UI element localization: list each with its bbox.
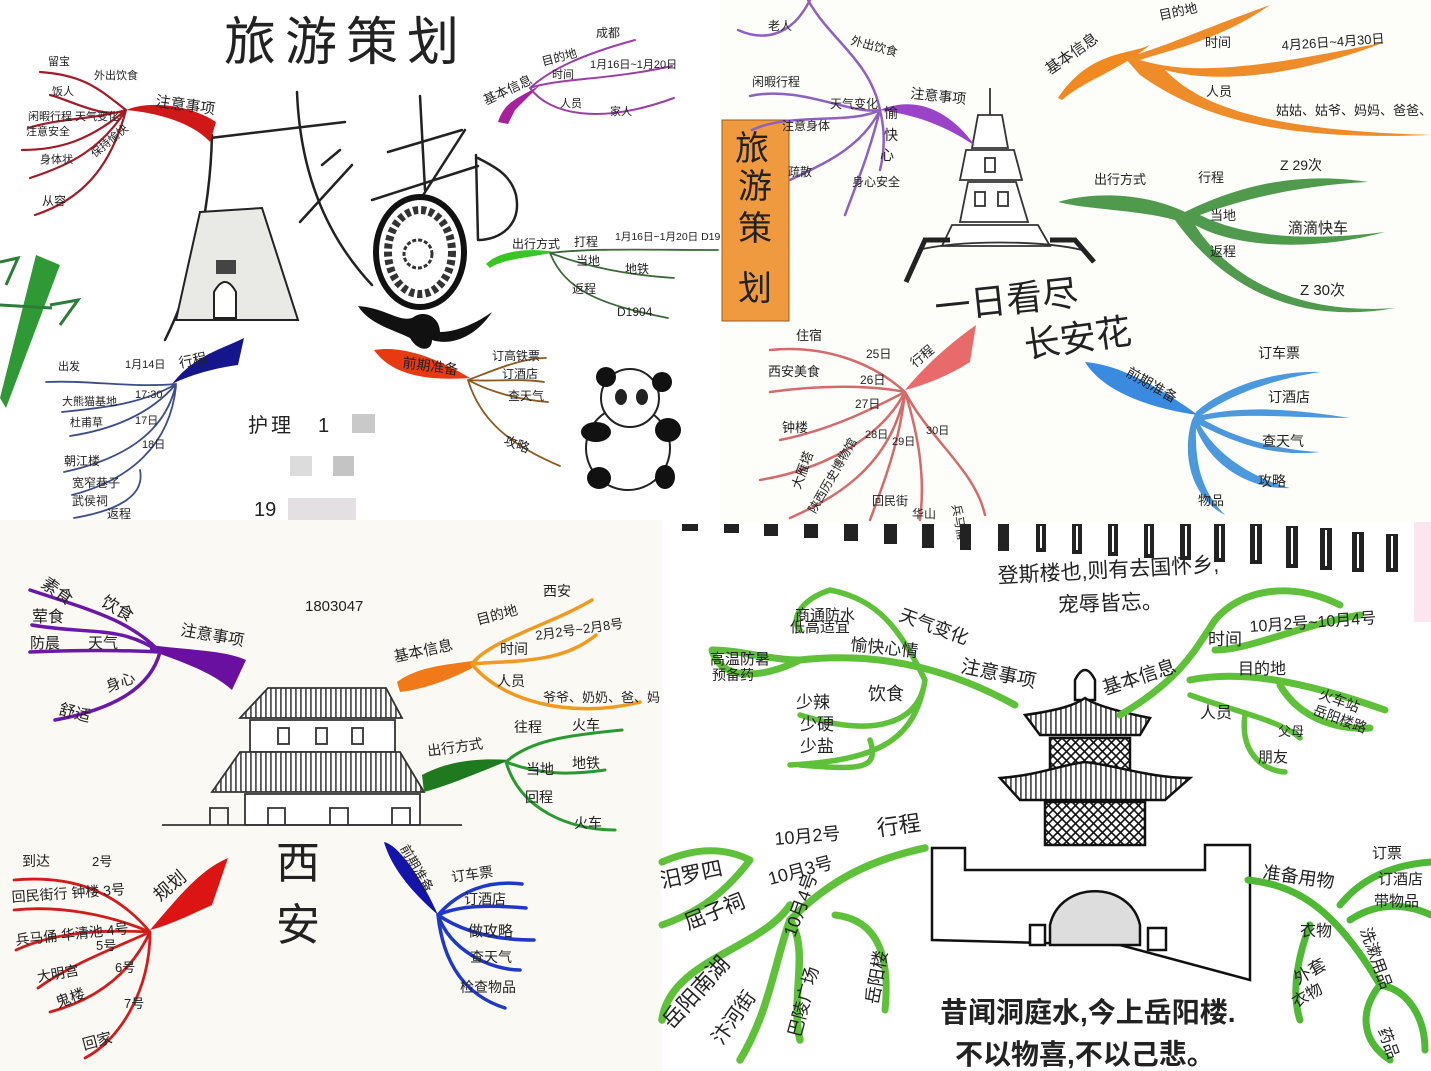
icon: city gate xyxy=(176,208,298,320)
branch: 行程 (pink red): 29日 xyxy=(892,436,915,448)
branch: 前期准备 (blue): 订车票 xyxy=(1258,345,1300,361)
quote top: 宠辱皆忘。 xyxy=(1057,590,1163,617)
branch: 行程 (green): 10月2号 xyxy=(774,823,841,849)
branch: 基本信息 (green): 时间 xyxy=(1208,630,1242,649)
branch: 准备用物 (green): 带物品 xyxy=(1374,893,1419,910)
branch: 基本信息 (orange): 人员 xyxy=(1206,84,1232,99)
author note xyxy=(248,414,375,521)
branch: 行程 (pink red): 陕西历史博物馆 xyxy=(805,435,860,516)
branch: 出行方式 (green): 当地 xyxy=(1210,208,1236,223)
branch: 准备用物 (green): 衣物 xyxy=(1300,922,1332,940)
branch: 前期准备 (orange red) xyxy=(374,348,560,466)
branch: 注意事项 (purple): 荤食 xyxy=(32,608,64,626)
branch: 前期准备 (orange red): 查天气 xyxy=(508,388,544,403)
branch: 行程 (green): 屈子祠 xyxy=(681,890,748,935)
branch: 出行方式 (green): D1904 xyxy=(617,305,653,319)
branch: 基本信息 (purple): 人员 xyxy=(560,97,582,110)
branch: 注意事项 (green): 少硬 xyxy=(800,715,834,734)
branch: 基本信息 (orange): 4月26日~4月30日 xyxy=(1281,31,1385,53)
branch: 行程 (pink red): 大雁塔 xyxy=(789,449,816,491)
branch: 行程 (navy): 宽窄巷子 xyxy=(72,475,120,490)
branch: 注意事项 (purple): 闲暇行程 xyxy=(752,74,800,89)
branch: 注意事项 (purple): 身心安全 xyxy=(852,174,900,189)
branch: 行程 (navy): 1月14日 xyxy=(125,359,165,371)
branch: 准备用物 (green): 外套 xyxy=(1290,955,1329,988)
branch: 出行方式 (green): 出行方式 xyxy=(426,735,484,759)
branch: 行程 (navy) xyxy=(46,338,244,521)
branch: 注意事项 (purple): 注意身体 xyxy=(782,118,830,133)
title banner: 旅游策划: 游 xyxy=(738,168,772,206)
branch: 行程 (green): 汴河街 xyxy=(707,987,761,1049)
icon: bamboo xyxy=(0,255,78,408)
branch: 行程 (pink red): 27日 xyxy=(855,397,880,411)
branch: 注意事项 (red): 留宝 xyxy=(48,54,70,68)
branch: 注意事项 (purple): 天气 xyxy=(88,635,118,652)
branch: 注意事项 (purple): 舒适 xyxy=(57,700,93,726)
branch: 行程 (green): 10月4号 xyxy=(780,870,821,939)
icon: bell tower xyxy=(906,88,1094,282)
branch: 基本信息 (orange): 西安 xyxy=(543,583,571,599)
branch: 准备用物 (green): 洗漱用品 xyxy=(1356,925,1395,992)
branch: 行程 (pink red): 行程 xyxy=(907,342,937,370)
branch: 注意事项 (purple): 老人 xyxy=(768,19,792,33)
branch: 行程 (pink red): 25日 xyxy=(866,347,891,361)
branch: 注意事项 (green): 商通防水 xyxy=(795,607,855,624)
branch: 基本信息 (orange): 人员 xyxy=(497,673,525,689)
branch: 注意事项 (green): 饮食 xyxy=(868,684,904,704)
branch: 行程 (pink red) xyxy=(760,325,985,541)
branch: 注意事项 (purple): 注意事项 xyxy=(179,620,246,650)
branch: 注意事项 (purple): 饮食 xyxy=(98,592,137,625)
branch: 行程 (green): 10月3号 xyxy=(766,852,835,889)
branch: 出行方式 (green): 滴滴快车 xyxy=(1288,219,1348,237)
branch: 基本信息 (green): 基本信息 xyxy=(1100,655,1179,700)
branch: 注意事项 (red): 饭人 xyxy=(52,85,74,98)
branch: 注意事项 (green): 预备药 xyxy=(712,667,754,683)
title banner: 旅游策划: 划 xyxy=(738,270,772,308)
branch: 注意事项 (green): 少辣 xyxy=(796,693,830,712)
branch: 前期准备 (orange red): 订高铁票 xyxy=(492,348,540,363)
branch: 注意事项 (green): 愉快心情 xyxy=(850,635,919,661)
branch: 行程 (navy): 18日 xyxy=(142,439,165,451)
icon: Yueyang Tower xyxy=(932,670,1250,980)
branch: 准备用物 (green): 衣物 xyxy=(1289,980,1326,1011)
branch: 基本信息 (purple): 1月16日~1月20日 xyxy=(590,59,677,71)
branch: 出行方式 (green): 当地 xyxy=(526,761,554,777)
branch: 出行方式 (green): 1月16日~1月20日 D19 xyxy=(615,231,721,243)
branch: 注意事项 (red): 注意安全 xyxy=(26,124,70,138)
branch: 注意事项 (purple): 素食 xyxy=(38,574,76,609)
branch: 准备用物 (green): 订票 xyxy=(1372,845,1402,862)
branch: 基本信息 (purple): 家人 xyxy=(610,104,632,118)
quote bottom xyxy=(940,997,1236,1070)
branch: 准备用物 (green): 准备用物 xyxy=(1261,862,1336,892)
panel: Xi'an plan bottom left xyxy=(11,574,660,1058)
branch: 基本信息 (green): 父母 xyxy=(1278,724,1304,739)
branch: 前期准备 (blue) xyxy=(1085,345,1350,515)
branch: 注意事项 (purple): 快 xyxy=(884,127,898,143)
branch: 注意事项 (red): 从容 xyxy=(42,193,66,208)
branch: 行程 (navy): 武侯祠 xyxy=(72,494,108,508)
branch: 行程 (navy): 17日 xyxy=(135,415,158,427)
branch: 规划 (red): 回民街行 钟楼 3号 xyxy=(11,881,126,905)
branch: 出行方式 (green): 火车 xyxy=(572,717,600,733)
branch: 行程 (pink red): 西安美食 xyxy=(768,364,820,379)
branch: 注意事项 (green): 注意事项 xyxy=(959,655,1038,693)
branch: 出行方式 (green): 返程 xyxy=(572,281,596,296)
quote bottom: 昔闻洞庭水,今上岳阳楼. xyxy=(940,997,1236,1028)
branch: 基本信息 (orange): 时间 xyxy=(1205,35,1231,50)
branch: 前期准备 (orange red): 前期准备 xyxy=(402,354,459,378)
label: 西安: 安 xyxy=(276,901,320,950)
branch: 出行方式 (green): 火车 xyxy=(574,815,602,831)
panel: Chengdu travel plan xyxy=(0,14,721,521)
icon: round sun bird emblem xyxy=(376,197,464,307)
Chengdu large calligraphy xyxy=(165,92,517,340)
branch: 准备用物 (green): 订酒店 xyxy=(1378,871,1423,888)
branch: 出行方式 (green) xyxy=(422,717,622,831)
branch: 行程 (green): 汨罗四 xyxy=(658,857,725,893)
branch: 规划 (red): 规划 xyxy=(150,867,190,905)
branch: 出行方式 (green): Z 29次 xyxy=(1280,157,1322,173)
branch: 注意事项 (purple): 愉 xyxy=(884,105,898,121)
branch: 行程 (pink red): 26日 xyxy=(860,373,885,387)
branch: 基本信息 (orange) xyxy=(1043,0,1431,136)
quote top xyxy=(997,553,1220,617)
branch: 行程 (pink red): 华山 xyxy=(912,507,936,521)
branch: 注意事项 (green) xyxy=(710,590,1038,767)
branch: 前期准备 (blue): 订酒店 xyxy=(464,891,506,907)
branch: 行程 (pink red): 30日 xyxy=(926,425,949,437)
branch: 出行方式 (green) xyxy=(1058,157,1395,312)
title banner: 旅游策划 xyxy=(722,120,789,321)
branch: 规划 (red): 5号 xyxy=(96,938,116,953)
branch: 行程 (pink red): 28日 xyxy=(865,429,888,441)
branch: 基本信息 (green): 人员 xyxy=(1200,704,1232,722)
label: 西安 xyxy=(276,839,320,950)
branch: 出行方式 (green): 出行方式 xyxy=(1094,172,1146,187)
branch: 规划 (red): 鬼楼 xyxy=(54,986,88,1012)
branch: 前期准备 (blue): 订车票 xyxy=(450,863,494,885)
branch: 规划 (red): 大明宫 xyxy=(36,962,80,985)
branch: 注意事项 (green): 少盐 xyxy=(800,737,834,756)
branch: 行程 (navy): 出发 xyxy=(58,359,80,373)
branch: 基本信息 (orange): 基本信息 xyxy=(1043,30,1101,78)
branch: 出行方式 (green): 出行方式 xyxy=(512,236,560,251)
label: 西安: 西 xyxy=(276,839,320,888)
branch: 行程 (navy): 朝江楼 xyxy=(64,453,100,468)
branch: 注意事项 (red): 外出饮食 xyxy=(94,68,138,82)
branch: 行程 (green): 岳阳楼 xyxy=(862,949,891,1006)
branch: 基本信息 (orange): 基本信息 xyxy=(392,637,455,666)
branch: 准备用物 (green): 药品 xyxy=(1374,1025,1402,1061)
branch: 注意事项 (purple): 天气变化 xyxy=(830,96,878,111)
student number: 1803047 xyxy=(305,598,363,615)
branch: 行程 (pink red): 回民街 xyxy=(872,494,908,508)
branch: 基本信息 (purple) xyxy=(481,26,677,124)
branch: 出行方式 (green): 打程 xyxy=(574,234,598,249)
branch: 前期准备 (blue): 查天气 xyxy=(1262,433,1304,449)
branch: 行程 (navy): 杜甫草 xyxy=(70,415,103,429)
branch: 准备用物 (green) xyxy=(1248,845,1431,1061)
branch: 基本信息 (orange): 目的地 xyxy=(475,602,519,628)
branch: 规划 (red): 6号 xyxy=(115,960,135,975)
branch: 出行方式 (green): 往程 xyxy=(514,719,542,735)
branch: 规划 (red): 2号 xyxy=(92,854,112,869)
branch: 基本信息 (green): 火车站 xyxy=(1317,686,1362,715)
branch: 基本信息 (green): 朋友 xyxy=(1258,749,1288,766)
branch: 前期准备 (blue): 前期准备 xyxy=(1124,364,1180,406)
branch: 行程 (navy): 17:30 xyxy=(135,389,163,401)
branch: 基本信息 (orange): 爷爷、奶奶、爸、妈 xyxy=(543,690,660,705)
branch: 基本信息 (purple): 成都 xyxy=(596,26,620,40)
quote bottom: 不以物喜,不以己悲。 xyxy=(955,1039,1215,1070)
branch: 前期准备 (blue): 查天气 xyxy=(470,949,512,965)
branch: 注意事项 (green): 低高适宜 xyxy=(790,619,850,636)
branch: 前期准备 (orange red): 攻略 xyxy=(502,433,532,456)
branch: 行程 (green): 巴陵广场 xyxy=(785,964,822,1039)
branch: 规划 (red): 到达 xyxy=(22,853,50,869)
branch: 基本信息 (orange): 时间 xyxy=(500,641,528,657)
branch: 基本信息 (purple): 时间 xyxy=(552,68,574,81)
branch: 基本信息 (purple): 基本信息 xyxy=(481,72,534,108)
branch: 前期准备 (orange red): 订酒店 xyxy=(502,367,538,381)
branch: 行程 (green): 行程 xyxy=(875,810,922,841)
branch: 前期准备 (blue): 检查物品 xyxy=(460,979,516,995)
branch: 基本信息 (green): 10月2号~10月4号 xyxy=(1249,609,1377,636)
branch: 行程 (pink red): 钟楼 xyxy=(782,420,808,435)
branch: 前期准备 (blue): 物品 xyxy=(1198,493,1224,508)
branch: 注意事项 (green): 高温防暑 xyxy=(710,651,770,668)
author note: 1 xyxy=(318,415,329,437)
branch: 出行方式 (green): 回程 xyxy=(525,789,553,805)
branch: 行程 (pink red): 住宿 xyxy=(796,328,822,343)
heading: 一日看尽长安花 xyxy=(933,272,1134,366)
branch: 前期准备 (blue): 做攻略 xyxy=(468,923,513,940)
branch: 基本信息 (green): 岳阳楼路 xyxy=(1311,702,1369,736)
branch: 注意事项 (purple) xyxy=(30,574,246,726)
branch: 注意事项 (purple): 疏散 xyxy=(788,164,812,179)
panel: Yueyang Tower plan bottom right xyxy=(657,524,1431,1070)
branch: 注意事项 (purple): 身心 xyxy=(104,670,138,696)
branch: 行程 (navy): 行程 xyxy=(177,349,208,371)
branch: 行程 (pink red): 兵马俑 xyxy=(949,503,970,541)
branch: 基本信息 (purple): 目的地 xyxy=(540,45,579,69)
branch: 注意事项 (red): 闲暇行程 天气变化 xyxy=(28,109,119,123)
heading: 一日看尽长安花: 一日看尽 xyxy=(933,272,1080,328)
branch: 出行方式 (green): 地铁 xyxy=(572,755,600,771)
branch: 注意事项 (red): 身体状 xyxy=(40,152,73,166)
branch: 规划 (red): 兵马俑 华清池 4号 xyxy=(15,920,129,948)
branch: 行程 (navy): 大熊猫基地 xyxy=(62,394,117,408)
branch: 基本信息 (green) xyxy=(1100,591,1385,772)
panel: Xi'an plan top right xyxy=(722,0,1431,541)
branch: 行程 (green) xyxy=(657,810,925,1060)
branch: 前期准备 (blue): 订酒店 xyxy=(1268,389,1310,405)
title: 旅游策划: 旅游策划 xyxy=(224,14,468,72)
branch: 基本信息 (green): 目的地 xyxy=(1238,660,1286,678)
branch: 规划 (red) xyxy=(11,853,228,1058)
branch: 前期准备 (blue) xyxy=(384,842,534,1008)
branch: 注意事项 (red): 保持愉快 xyxy=(88,121,131,160)
author note: 19 xyxy=(254,499,276,521)
icon: black ribbon xyxy=(358,306,492,349)
quote top: 登斯楼也,则有去国怀乡, xyxy=(997,553,1220,588)
branch: 注意事项 (red) xyxy=(22,54,216,215)
branch: 注意事项 (green): 天气变化 xyxy=(897,605,971,648)
branch: 注意事项 (purple) xyxy=(738,0,975,215)
branch: 基本信息 (orange): 2月2号~2月8号 xyxy=(534,616,624,643)
title banner: 旅游策划: 旅 xyxy=(735,130,769,168)
branch: 注意事项 (purple): 防晨 xyxy=(30,635,60,652)
icon: Xi'an gate tower xyxy=(162,688,462,825)
branch: 注意事项 (purple): 心 xyxy=(880,147,894,163)
branch: 出行方式 (green): 返程 xyxy=(1210,244,1236,259)
author note: 护理 xyxy=(248,414,294,437)
icon: panda xyxy=(581,367,681,490)
branch: 行程 (green): 岳阳南湖 xyxy=(657,951,735,1033)
branch: 注意事项 (red): 注意事项 xyxy=(154,92,216,118)
branch: 出行方式 (green): 地铁 xyxy=(625,262,649,276)
branch: 基本信息 (orange) xyxy=(392,583,660,709)
title banner: 旅游策划: 策 xyxy=(738,210,772,248)
branch: 出行方式 (green) xyxy=(486,231,721,319)
heading: 一日看尽长安花: 长安花 xyxy=(1021,310,1134,366)
spiral binding xyxy=(682,524,1398,572)
branch: 出行方式 (green): 当地 xyxy=(576,254,600,268)
branch: 注意事项 (purple): 外出饮食 xyxy=(849,32,899,59)
branch: 行程 (navy): 返程 xyxy=(107,506,131,521)
branch: 出行方式 (green): 行程 xyxy=(1198,170,1224,185)
branch: 规划 (red): 回家 xyxy=(81,1030,114,1054)
branch: 出行方式 (green): Z 30次 xyxy=(1300,282,1345,299)
branch: 前期准备 (blue): 攻略 xyxy=(1258,473,1286,489)
branch: 基本信息 (orange): 目的地 xyxy=(1158,0,1199,23)
branch: 注意事项 (purple): 注意事项 xyxy=(910,85,967,107)
branch: 前期准备 (blue): 前期准备 xyxy=(397,842,436,895)
branch: 规划 (red): 7号 xyxy=(124,996,144,1011)
